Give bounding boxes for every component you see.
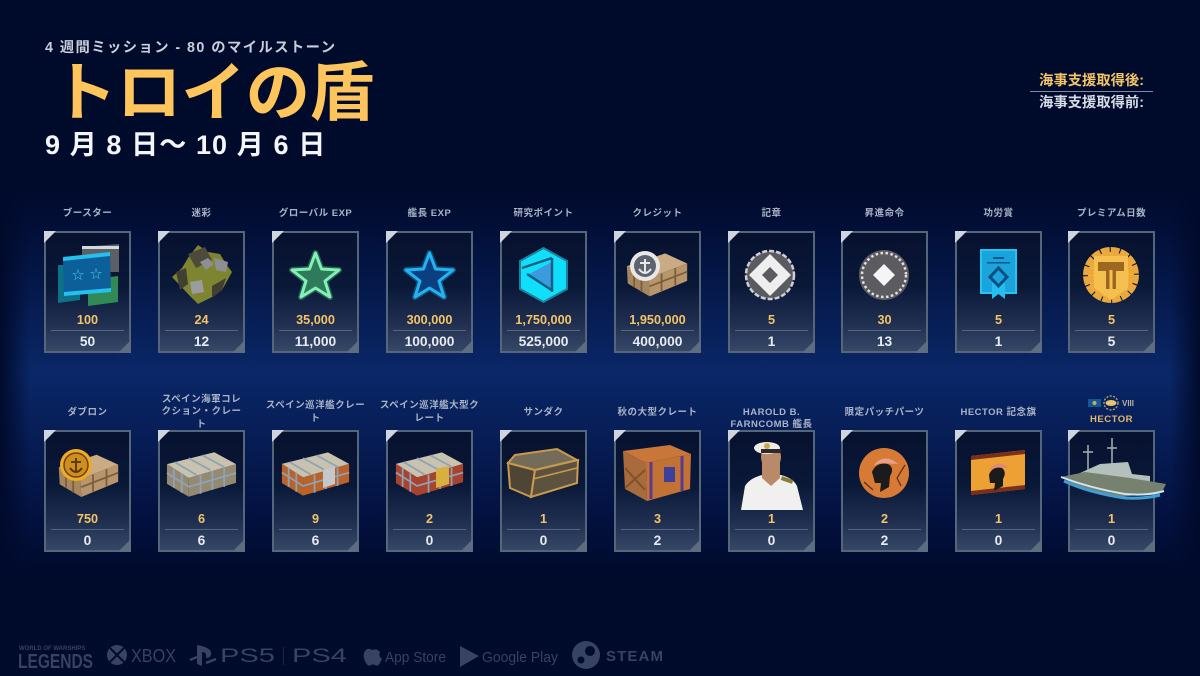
reward card: booster [44,207,131,353]
reward card: ship Hector [1061,396,1166,552]
reward card: autumn large crate: 2 [654,533,662,548]
icon: ship Hector [1061,438,1166,498]
reward card: Santa chest: 0 [540,533,548,548]
reward card: Spanish cruiser large crate [380,399,479,552]
reward card: booster: 50 [80,334,95,349]
logo: World of Warships Legends [18,646,93,673]
reward card: ship Hector: HECTOR [1090,414,1133,425]
icon: insignia medal [746,251,794,299]
reward card: commander EXP: 100,000 [405,334,455,349]
reward card: Santa chest: 1 [540,512,547,526]
icon: research hexagon [520,248,567,302]
reward card: research points: 1,750,000 [515,313,572,327]
reward card: ship Hector: 0 [1108,533,1116,548]
reward card: premium days: 5 [1108,313,1115,327]
reward card: autumn large crate: 3 [654,512,661,526]
reward card: Spanish cruiser crate: ト [310,413,321,424]
reward card: premium days [1068,207,1155,353]
reward card: limited patch parts [841,406,928,552]
icon: blue star [406,253,453,297]
reward card: doubloons: 750 [77,512,98,526]
reward card: merit award [955,207,1042,353]
reward card: camouflage [158,207,245,353]
reward card: credits: 1,950,000 [629,313,686,327]
reward card: research points [500,207,587,353]
footer: platform logos [18,641,663,673]
reward card: Spanish cruiser crate [266,399,365,552]
icon: booster flags [58,244,119,306]
reward card: Spanish navy collection crate: スペイン海軍コレ [162,393,241,405]
icon: gear disc [859,250,909,300]
reward card: premium days: プレミアム日数 [1077,207,1146,219]
reward card: insignia: 記章 [761,207,782,219]
icon: credits crate [627,251,687,296]
reward card: limited patch parts: 限定パッチパーツ [845,406,924,418]
reward card: merit award: 1 [995,334,1003,349]
reward card: insignia: 5 [768,313,775,327]
logo: Steam [572,641,663,669]
logo: World of Warships Legends: WORLD OF WARSHIPS [19,646,85,652]
reward card: global EXP [272,207,359,353]
logo: Google Play [460,646,558,667]
reward card: Spanish navy collection crate: 6 [198,512,205,526]
reward card: Spanish navy collection crate: 6 [198,533,206,548]
legend: row labels: 海事支援取得後: [1039,71,1144,89]
reward card: commander EXP: 300,000 [407,313,452,327]
reward card: limited patch parts: 2 [881,512,888,526]
reward card: promotion orders: 昇進命令 [864,207,905,219]
reward card: commander EXP: 艦長 EXP [408,207,451,219]
reward card: insignia: 1 [768,334,776,349]
reward card: autumn large crate: 秋の大型クレート [617,406,698,418]
reward card: Spanish navy collection crate [158,393,245,552]
reward card: Spanish cruiser large crate: スペイン巡洋艦大型ク [380,399,479,411]
logo: Steam: STEAM [606,648,663,665]
legend: row labels [1030,71,1153,111]
icon: doubloon crate [59,449,118,497]
background blue band [0,185,1200,575]
reward card: Spanish cruiser crate: 6 [312,533,320,548]
reward card: Hector commemorative flag [955,406,1042,552]
logo: PS5 and PS4: PS5 [220,646,275,667]
legend: row labels: 海事支援取得前: [1039,93,1144,111]
reward card: global EXP: 11,000 [295,334,337,349]
reward card: Spanish navy collection crate: ト [196,419,207,430]
icon: certificate ribbon [981,250,1016,299]
reward card: Spanish cruiser crate: 9 [312,512,319,526]
icon: orange helmet patch [859,448,909,498]
reward card: commander Harold B. Farncomb: HAROLD B. [743,407,800,418]
logo: Xbox [107,645,176,666]
reward card: commander Harold B. Farncomb: 0 [768,533,776,548]
icon: orange crate [623,445,691,501]
logo: App Store: App Store [385,649,446,666]
logo: Xbox: XBOX [131,646,176,666]
reward card: premium days: 5 [1108,334,1116,349]
logo: App Store [364,649,446,666]
icon: blue and orange crate [282,452,349,496]
reward card: Spanish cruiser large crate: レート [414,413,445,424]
reward card: promotion orders: 30 [877,313,892,327]
reward card: autumn large crate [614,406,701,552]
reward card: credits [614,208,701,353]
icon: treasure chest [508,449,578,497]
reward card: Spanish cruiser large crate: 2 [426,512,433,526]
icon: nation flag and tier: VIII [1122,399,1134,408]
reward card: promotion orders [841,207,928,353]
reward card: doubloons [44,406,131,552]
reward card: doubloons: 0 [84,533,92,548]
reward card: global EXP: 35,000 [296,313,335,327]
logo: World of Warships Legends: LEGENDS [18,651,93,673]
reward card: booster: ブースター [63,207,112,219]
title: トロイの盾 [52,57,374,129]
reward card: Hector commemorative flag: 0 [995,533,1003,548]
logo: PS5 and PS4 [190,645,348,667]
reward card: ship Hector: 1 [1108,512,1115,526]
icon: red and gold crate [396,452,463,496]
logo: PS5 and PS4: PS4 [292,646,348,667]
reward card: commander Harold B. Farncomb: 1 [768,512,775,526]
reward card: credits: 400,000 [633,334,683,349]
reward card: Santa chest: サンダク [523,406,564,418]
icon: commemorative flag [971,450,1025,495]
icon: nation flag and tier [1088,396,1134,410]
reward card: commander Harold B. Farncomb [728,407,815,552]
reward card: Spanish navy collection crate: クション・クレー [161,406,242,417]
reward card: Hector commemorative flag: HECTOR 記念旗 [960,406,1037,418]
reward card: global EXP: グローバル EXP [279,207,352,219]
reward card: doubloons: ダブロン [67,406,108,418]
reward card: limited patch parts: 2 [881,533,889,548]
icon: booster flags: ☆ [90,267,102,281]
reward card: merit award: 5 [995,313,1002,327]
reward card: research points: 研究ポイント [513,207,574,219]
reward card: commander Harold B. Farncomb: FARNCOMB 艦長 [730,418,813,430]
reward card: insignia [728,207,815,353]
icon: booster flags: ☆ [72,268,84,282]
icon: commander portrait [741,442,803,510]
reward card: credits: クレジット [632,208,683,219]
icon: grey crate [167,452,236,497]
icon: camouflage patch [172,245,232,304]
logo: Google Play: Google Play [482,649,558,666]
reward card: Spanish cruiser crate: スペイン巡洋艦クレー [266,399,365,411]
date range: 9 月 8 日～ 10 月 6 日 [45,130,326,160]
icon: green star [292,253,339,297]
reward card: merit award: 功労賞 [983,207,1014,219]
reward card: booster: 100 [77,313,98,327]
icon: gold emblem [1088,252,1134,300]
reward card: camouflage: 12 [194,334,209,349]
subtitle: 4 週間ミッション - 80 のマイルストーン [45,39,335,56]
reward card: Santa chest [500,406,587,552]
reward card: research points: 525,000 [519,334,569,349]
reward card: commander EXP [386,207,473,353]
reward card: camouflage: 迷彩 [191,207,212,219]
reward card: promotion orders: 13 [877,334,892,349]
reward card: Hector commemorative flag: 1 [995,512,1002,526]
reward card: camouflage: 24 [194,313,209,327]
reward card: Spanish cruiser large crate: 0 [426,533,434,548]
